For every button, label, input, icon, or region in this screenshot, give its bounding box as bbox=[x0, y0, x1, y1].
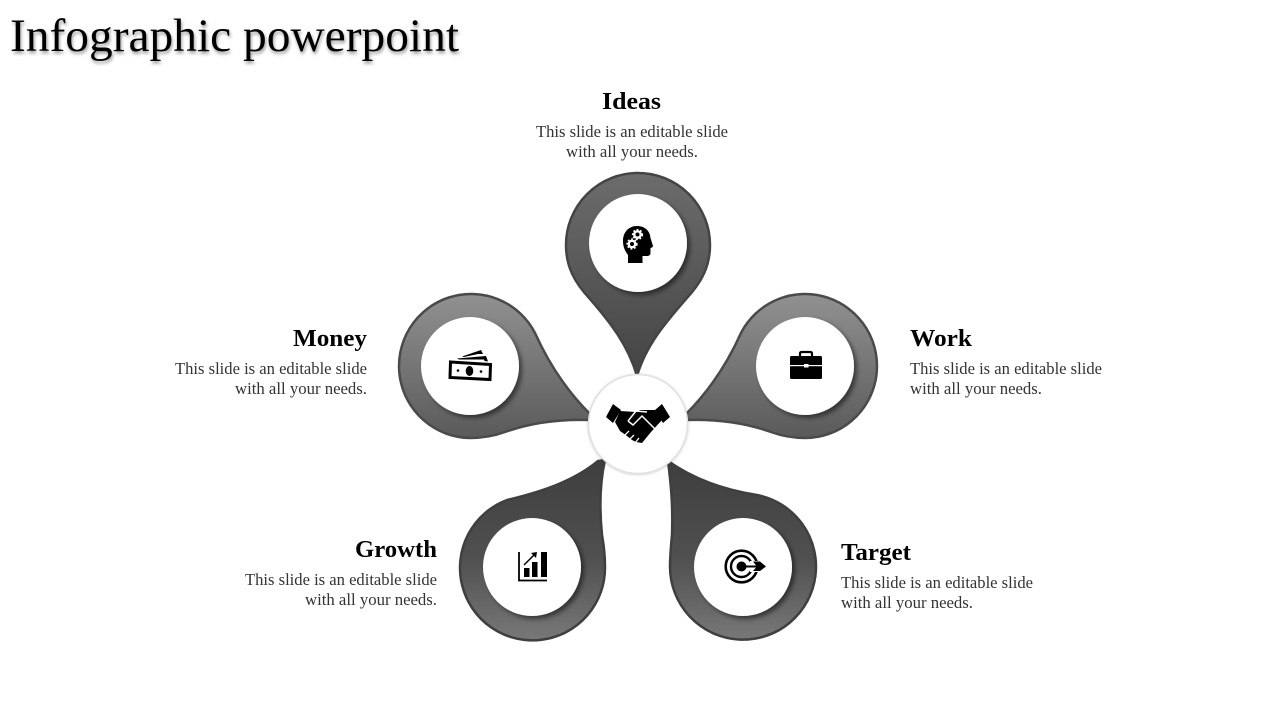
title: Infographic powerpoint bbox=[10, 10, 459, 62]
petal: Work bbox=[686, 294, 877, 438]
label: Target: Target bbox=[841, 540, 911, 566]
circle: Money bbox=[421, 317, 519, 415]
text: Work description: with all your needs. bbox=[910, 379, 1042, 398]
label: Work: Work bbox=[910, 326, 973, 352]
text: Ideas description bbox=[536, 122, 728, 161]
icon: bar chart bbox=[519, 552, 547, 580]
text: Target description: This slide is an editable slide bbox=[841, 573, 1033, 592]
circle: Work bbox=[756, 317, 854, 415]
label: Target bbox=[841, 540, 1033, 612]
label: Money: Money bbox=[293, 326, 367, 352]
petal: Target bbox=[668, 461, 816, 640]
text: Growth description: This slide is an editable slide bbox=[245, 570, 437, 589]
text: Growth description: with all your needs. bbox=[305, 590, 437, 609]
label: Ideas bbox=[536, 89, 728, 161]
petal: Ideas bbox=[566, 173, 710, 376]
text: Target description bbox=[841, 573, 1033, 612]
circle: Ideas bbox=[589, 194, 687, 292]
icon: handshake bbox=[606, 404, 670, 443]
label: Growth bbox=[245, 537, 437, 609]
icon: briefcase bbox=[790, 352, 822, 379]
icon: banknotes bbox=[450, 350, 490, 380]
circle: Growth bbox=[483, 518, 581, 616]
text: Money description: This slide is an editable slide bbox=[175, 359, 367, 378]
petal: Growth bbox=[460, 460, 605, 640]
text: Growth description bbox=[245, 570, 437, 609]
center circle bbox=[588, 374, 688, 474]
label: Money bbox=[175, 326, 367, 398]
label: Growth: Growth bbox=[355, 537, 437, 563]
text: Ideas description: with all your needs. bbox=[566, 142, 698, 161]
label: Ideas: Ideas bbox=[602, 89, 661, 115]
text: Work description bbox=[910, 359, 1102, 398]
text: Target description: with all your needs. bbox=[841, 593, 973, 612]
text: Work description: This slide is an editable slide bbox=[910, 359, 1102, 378]
icon: target with arrow bbox=[726, 551, 766, 582]
text: Money description bbox=[175, 359, 367, 398]
text: Ideas description: This slide is an editable slide bbox=[536, 122, 728, 141]
text: Money description: with all your needs. bbox=[235, 379, 367, 398]
label: Work bbox=[910, 326, 1102, 398]
petal: Money bbox=[399, 294, 590, 438]
circle: Target bbox=[694, 518, 792, 616]
icon: head with gears bbox=[623, 226, 653, 263]
